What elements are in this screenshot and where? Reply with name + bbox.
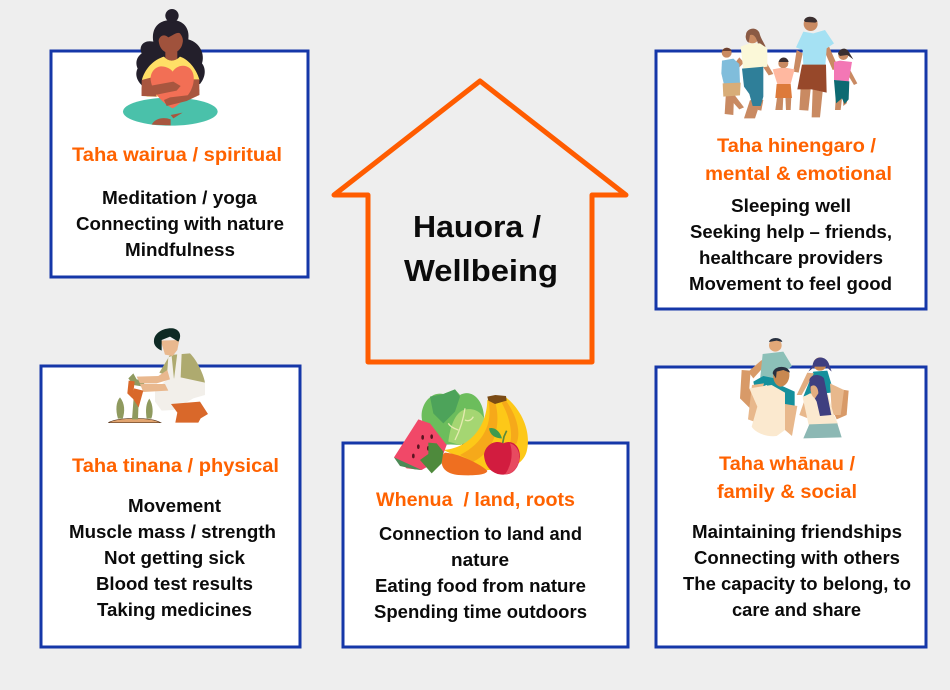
heading [705,136,892,185]
text block: Taking medicines [97,600,252,620]
panel: Taha hinengaro / mental & emotional [656,17,926,309]
panel: Taha whānau / family & social [656,338,926,647]
heading: Taha wairua / spiritual [72,145,282,166]
panel: Whenua / land, roots [343,389,628,647]
text block [76,188,284,260]
icon: meditating woman hugging heart [123,9,218,126]
title: Hauora / [413,209,541,244]
text block [69,496,276,620]
text block: healthcare providers [699,248,883,268]
text block: Movement [128,496,221,516]
panel: Taha tinana / physical [41,328,300,647]
text block [689,196,892,294]
text block: Meditation / yoga [102,188,258,208]
text block: Not getting sick [104,548,246,568]
text block: Sleeping well [731,196,851,216]
text block: Mindfulness [125,240,235,260]
heading: Taha tinana / physical [72,456,279,477]
icon: parents carrying children on shoulders [740,338,849,438]
heading: Taha hinengaro / [717,136,877,157]
text block: Eating food from nature [375,576,586,596]
heading: mental & emotional [705,164,892,185]
text block: Maintaining friendships [692,522,902,542]
text block: Movement to feel good [689,274,892,294]
house outline with title [334,81,626,362]
heading: Taha whānau / [719,454,856,475]
text block: Muscle mass / strength [69,522,276,542]
heading [717,454,857,503]
title: Wellbeing [404,253,558,288]
text block [374,524,587,622]
text block: Blood test results [96,574,253,594]
icon: fruit and vegetables [394,389,528,475]
text block: Connecting with nature [76,214,284,234]
text block: Connection to land and [379,524,582,544]
icon: person harvesting carrots [108,328,208,423]
text block: The capacity to belong, to [683,574,911,594]
panel: Taha wairua / spiritual [51,9,308,277]
title [404,209,558,288]
text block: Connecting with others [694,548,900,568]
text block [683,522,911,620]
text block: nature [451,550,509,570]
text block: Seeking help – friends, [690,222,892,242]
text block: Spending time outdoors [374,602,587,622]
heading: Whenua / land, roots [376,490,575,511]
heading: family & social [717,482,857,503]
icon: family walking holding hands [721,17,857,118]
text block: care and share [732,600,861,620]
